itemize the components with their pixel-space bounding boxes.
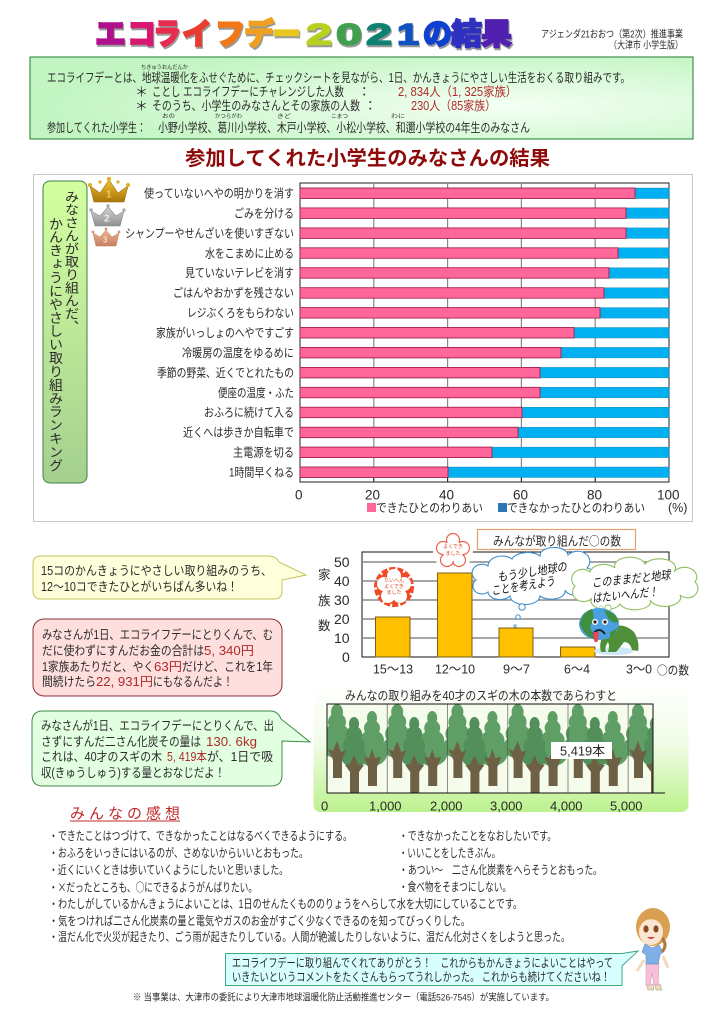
axis labels <box>321 798 643 814</box>
panel: family count chart <box>318 530 698 678</box>
x axis labels: 3～0 <box>626 662 652 676</box>
panel: introduction <box>30 57 693 139</box>
chart title: みんなが取り組んだ○の数 <box>493 530 621 550</box>
panel: introduction: そのうち、小学生のみなさんとその家族の人数 <box>152 98 360 113</box>
icon: tired earth <box>579 608 638 655</box>
stamp: outlined blossom: ました <box>445 551 461 557</box>
x axis labels: 15～13 <box>373 662 413 676</box>
y axis labels: 0 <box>342 649 350 665</box>
panel: introduction: おの <box>162 113 175 120</box>
bar labels: ごみを分ける <box>234 205 294 220</box>
title: 2 <box>306 18 332 52</box>
text block: comments: ・あつい～ 二さん化炭素をへらそうとおもった。 <box>399 863 602 877</box>
panel: introduction: ： <box>358 85 371 99</box>
bar labels: 家族がいっしょのへやですごす <box>156 325 294 340</box>
panel: introduction: 小野小学校、葛川小学校、木戸小学校、小松小学校、和邇小学校の4年生のみなさん <box>158 120 530 135</box>
bar labels: おふろに続けて入る <box>204 406 294 420</box>
stamp: filled blossom <box>376 569 412 605</box>
callout: money saved: 間続けたら <box>42 675 96 689</box>
panel: introduction: 2, 834人（1, 325家族） <box>398 85 517 99</box>
footer note: ※ 当事業は、大津市の委託により大津市地球温暖化防止活動推進センター（電話526-7545）が実施しています。 <box>133 992 554 1004</box>
callout: CO2 saved: さずにすんだ二さん化炭その量は <box>41 734 201 749</box>
axis labels: 40 <box>439 488 454 502</box>
bar labels: レジぶくろをもらわない <box>187 306 294 320</box>
text block: comments: ・できたことはつづけて、できなかったことはなるべくできるようにする。 <box>49 829 352 843</box>
callout: thanks: いきたいというコメントをたくさんもらってうれしかった。 これからも続けてくださいね！ <box>232 970 610 984</box>
x axis labels <box>373 662 689 678</box>
title: コ <box>127 18 156 52</box>
callout: money saved: 1家族あたりだと、やく <box>42 660 154 674</box>
icon: silver crown: 2 <box>104 214 110 224</box>
icon: girl character <box>636 908 670 990</box>
panel: cedar trees chart: みんなの取り組みを40才のスギの木の本数であらわすと <box>345 688 617 703</box>
title: 1 <box>397 18 419 52</box>
panel: introduction: きど <box>277 112 292 120</box>
bar chart <box>362 552 669 657</box>
panel: introduction: ＊ <box>135 98 148 114</box>
panel: introduction: 参加してくれた小学生： <box>47 120 146 135</box>
axis labels: 60 <box>513 488 528 502</box>
stamp: outlined blossom <box>433 531 473 571</box>
title: 結 <box>451 18 482 52</box>
text block: comments: ・できなかったことをなおしたいです。 <box>399 829 556 843</box>
callout: CO2 saved: 5, 419本 <box>167 750 207 764</box>
title: 2 <box>366 18 392 52</box>
stamp: filled blossom: ました <box>386 590 402 596</box>
y axis labels: 50 <box>334 554 350 570</box>
bar labels: 1時間早くねる <box>229 466 294 480</box>
panel: introduction: ことし エコライフデーにチャレンジした人数 <box>152 84 344 99</box>
legend <box>367 501 687 515</box>
bar labels: 使っていないへやの明かりを消す <box>144 186 294 200</box>
icon: gold crown: 1 <box>106 190 112 200</box>
legend: できなかったひとのわりあい <box>507 501 645 515</box>
header note: アジェンダ21おおつ（第2次）推進事業 <box>541 28 683 40</box>
icon: bronze crown <box>92 228 120 246</box>
panel: ranking chart <box>34 174 692 522</box>
axis labels: 80 <box>587 488 602 502</box>
callout: CO2 saved: 130. 6kg <box>206 735 257 749</box>
callout: most common result <box>33 556 306 599</box>
title: デ <box>244 18 274 52</box>
y axis labels: 20 <box>334 611 350 627</box>
y axis labels: 家 <box>318 568 331 582</box>
axis labels <box>295 488 680 502</box>
text block: comments: ・食べ物をそまつにしない。 <box>399 880 511 894</box>
heading: results: 参加してくれた小学生のみなさんの結果 <box>185 147 550 170</box>
stacked bar chart <box>300 183 669 482</box>
axis labels: 3,000 <box>490 798 523 814</box>
y axis labels <box>318 554 350 665</box>
callout: money saved: みなさんが1日、エコライフデーにとりくんで、む <box>42 627 273 642</box>
axis labels: 20 <box>365 488 380 502</box>
text block: comments: ・いいことをしたきぶん。 <box>399 846 500 860</box>
heading: impressions: みんなの感想 <box>70 806 180 822</box>
icon: gold crown <box>88 177 130 202</box>
value label <box>551 742 612 759</box>
x axis labels: 12～10 <box>435 662 475 676</box>
axis labels: 4,000 <box>550 798 583 814</box>
thought cloud: green: このままだと地球 <box>591 568 673 590</box>
stamp: filled blossom: たいへん <box>384 578 404 584</box>
callout: money saved: 5, 340円 <box>204 644 254 658</box>
value label: 5,419本 <box>560 744 605 758</box>
x axis labels: 9～7 <box>503 662 530 676</box>
y axis labels: 40 <box>334 573 350 589</box>
text block: comments: ・気をつければ二さん化炭素の量と電気やガスのお金がすごく少なくできるのを知ってびっくりした。 <box>49 913 470 928</box>
panel: introduction: わに <box>391 113 405 120</box>
legend: (%) <box>668 501 687 515</box>
panel: introduction: こまつ <box>331 113 348 120</box>
x axis labels: ○の数 <box>657 662 689 678</box>
callout: money saved: にもなるんだよ！ <box>153 675 233 689</box>
callout: CO2 saved: 収(きゅうしゅう)する量とおなじだよ！ <box>41 766 225 780</box>
title: エ <box>95 18 126 52</box>
callout: CO2 saved: みなさんが1日、エコライフデーにとりくんで、出 <box>41 718 274 733</box>
bar labels: シャンプーやせんざいを使いすぎない <box>125 225 294 240</box>
title: ラ <box>153 18 181 52</box>
callout: money saved: 63円 <box>154 660 182 674</box>
bar labels: 便座の温度・ふた <box>218 386 294 400</box>
text block: comments: ・近くにいくときは歩いていくようにしたいと思いました。 <box>49 862 288 877</box>
callout: money saved: だに使わずにすんだお金の合計は <box>42 643 204 658</box>
panel: introduction: ＊ <box>135 84 148 100</box>
callout: money saved: 22, 931円 <box>96 675 153 689</box>
axis labels: 0 <box>295 488 303 502</box>
ranking label: みなさんが取り組んだ、 <box>64 190 80 333</box>
y axis labels: 30 <box>334 592 350 608</box>
text block: comments: ・おふろをいっきにはいるのが、さめないからいいとおもった。 <box>49 845 308 860</box>
title: 果 <box>481 18 512 52</box>
axis labels: 100 <box>657 488 680 502</box>
tree pictogram bars <box>322 704 688 793</box>
bar labels: 季節の野菜、近くでとれたもの <box>157 366 294 380</box>
header note <box>541 28 683 52</box>
x axis labels: 6～4 <box>564 662 590 676</box>
callout: CO2 saved <box>32 711 310 786</box>
stamp: filled blossom: よくでき <box>384 583 404 590</box>
bar labels: 近くへは歩きか自転車で <box>183 425 294 440</box>
text block: comments: ・わたしがしているかんきょうによいことは、1日のせんたくもののりょうをへらして水を大切にしていることです。 <box>49 896 522 911</box>
y axis labels: 族 <box>318 594 331 608</box>
axis labels: 5,000 <box>610 798 643 814</box>
thought cloud: blue: ことを考えよう <box>490 574 556 598</box>
callout: thanks: エコライフデーに取り組んでくれてありがとう！ これからもかんきょうによいことはやって <box>232 955 613 970</box>
bar labels: 見ていないテレビを消す <box>185 266 294 280</box>
callout: money saved: だけど、これを1年 <box>182 660 273 674</box>
y axis labels: 10 <box>334 630 350 646</box>
bar labels <box>125 186 294 480</box>
text block: comments <box>49 829 602 944</box>
header note: （大津市 小学生版） <box>609 38 683 52</box>
bar labels: ごはんやおかずを残さない <box>173 285 294 300</box>
axis labels: 2,000 <box>430 798 463 814</box>
panel: introduction: 230人（85家族） <box>411 99 496 113</box>
panel: introduction: ちきゅうおんだんか <box>141 64 188 71</box>
title <box>95 18 512 52</box>
ranking label: かんきょうにやさしい取り組みランキング <box>48 217 64 472</box>
thought cloud: green: はたいへんだ！ <box>591 585 659 605</box>
callout: thanks <box>226 951 638 986</box>
title: フ <box>215 18 245 52</box>
text block: comments: ・×だったところも、○にできるようがんばりたい。 <box>49 878 257 896</box>
title: の <box>423 18 452 52</box>
title: 0 <box>336 18 362 52</box>
legend: できたひとのわりあい <box>376 501 483 515</box>
callout: money saved <box>33 619 282 696</box>
panel: introduction: かつらがわ <box>215 112 242 120</box>
bar labels: 冷暖房の温度をゆるめに <box>182 346 294 360</box>
icon: bronze crown: 3 <box>103 236 108 244</box>
bar labels: 主電源を切る <box>233 446 294 460</box>
axis labels: 1,000 <box>369 798 402 814</box>
callout: most common result: 12～10コできたひとがいちばん多いね！ <box>41 579 238 594</box>
bar labels: 水をこまめに止める <box>205 246 294 260</box>
axis labels: 0 <box>321 798 328 814</box>
callout: CO2 saved: が、1日で吸 <box>207 749 273 764</box>
thought cloud: blue <box>472 547 594 627</box>
thought cloud: blue: もう少し地球の <box>496 559 568 584</box>
callout: CO2 saved: これは、40才のスギの木 <box>41 750 162 764</box>
thought cloud: green <box>572 557 698 611</box>
panel: introduction: ： <box>364 99 377 113</box>
y axis labels: 数 <box>318 618 331 633</box>
stamp: outlined blossom: よくでき <box>443 543 463 550</box>
icon: silver crown <box>89 204 126 226</box>
title: ー <box>272 18 301 52</box>
ranking label <box>43 181 87 483</box>
callout: most common result: 15コのかんきょうにやさしい取り組みのうち、 <box>41 564 272 578</box>
text block: comments: ・温だん化で火災が起きたり、ごう雨が起きたりしている。人間が絶滅したりしないように、温だん化対さくをしようと思った。 <box>49 929 570 944</box>
panel: cedar trees chart <box>314 684 688 814</box>
title: イ <box>182 18 212 52</box>
